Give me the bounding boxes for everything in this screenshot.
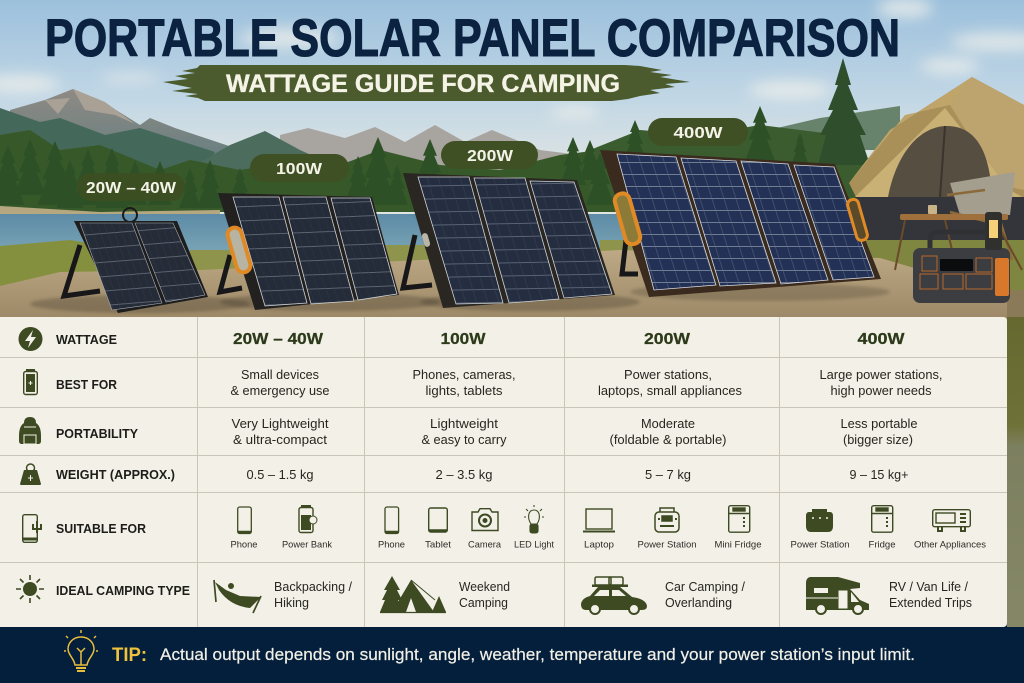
icon: phone — [238, 507, 251, 534]
icon: fridge — [872, 506, 893, 532]
row: weight — [20, 464, 908, 485]
label: 20W to 40W: 20W – 40W — [86, 180, 177, 197]
icon: RV — [806, 577, 869, 614]
label: 400W: 400W — [674, 125, 724, 142]
row: wattage — [18, 327, 906, 351]
row: portability: Lightweight — [430, 416, 498, 431]
row: portability: & ultra-compact — [233, 432, 327, 447]
solar panel: 400W — [600, 150, 881, 297]
background: camping landscape — [0, 0, 1024, 320]
row: ideal camping type: Overlanding — [665, 595, 732, 610]
icon: power bank — [299, 505, 317, 532]
row: suitable for: Other Appliances — [914, 540, 986, 550]
icon: mini fridge — [729, 506, 750, 532]
row: ideal camping type: IDEAL CAMPING TYPE — [56, 583, 190, 598]
right edge strip — [1007, 317, 1024, 627]
icon: sun — [16, 575, 44, 603]
row: portability: PORTABILITY — [56, 426, 138, 441]
row: wattage: 20W – 40W — [233, 331, 324, 348]
row: weight: 9 – 15 kg+ — [850, 467, 908, 482]
row: wattage: 100W — [440, 331, 486, 348]
row: suitable for: Phone — [378, 540, 405, 550]
tent — [849, 77, 1024, 240]
label: 20W to 40W — [77, 173, 185, 201]
solar panel: 20W to 40W — [64, 208, 208, 313]
icon: laptop — [583, 509, 615, 532]
row: best for — [24, 367, 942, 398]
solar panel: 200W — [403, 173, 615, 308]
icon: phone — [385, 507, 399, 534]
row: wattage: WATTAGE — [56, 332, 117, 347]
row: suitable for: Phone — [230, 540, 258, 550]
tip bar: TIP: — [112, 645, 147, 666]
row: ideal camping type: RV / Van Life / — [889, 579, 968, 594]
row: best for: Power stations, — [624, 367, 712, 382]
icon: weight — [20, 464, 41, 485]
icon: lightning bolt — [18, 327, 42, 351]
row: ideal camping type — [16, 575, 972, 614]
row: wattage: 400W — [858, 331, 906, 348]
row: portability: Very Lightweight — [232, 416, 329, 431]
row: wattage: 200W — [644, 331, 691, 348]
icon: hammock — [214, 580, 261, 613]
row: best for: high power needs — [830, 383, 932, 398]
row: suitable for: LED Light — [514, 540, 554, 550]
row: portability: Moderate — [641, 416, 695, 431]
icon: battery — [24, 369, 37, 394]
icon: other appliances — [933, 510, 970, 531]
row: ideal camping type: Camping — [459, 595, 508, 610]
row: suitable for: Tablet — [425, 540, 451, 550]
row: best for: Small devices — [241, 367, 319, 382]
row: ideal camping type: Extended Trips — [889, 595, 972, 610]
row: suitable for — [22, 505, 986, 550]
camp table and chair — [895, 172, 1022, 270]
icon: LED light — [524, 505, 544, 533]
row: portability: & easy to carry — [422, 432, 507, 447]
row: ideal camping type: Hiking — [274, 595, 309, 610]
label: 100W: 100W — [276, 161, 323, 178]
row: ideal camping type: Car Camping / — [665, 579, 745, 594]
row: best for: laptops, small appliances — [598, 383, 742, 398]
icon: trees and tent — [380, 576, 446, 612]
icon: backpack — [19, 417, 41, 444]
icon: power station outline — [655, 508, 679, 532]
power station — [913, 212, 1010, 303]
row: suitable for: Power Station — [790, 540, 850, 550]
row: best for: Phones, cameras, — [412, 367, 516, 382]
row: suitable for: Laptop — [584, 540, 614, 550]
row: ideal camping type: Weekend — [459, 579, 510, 594]
row: portability: Less portable — [840, 416, 918, 431]
row: suitable for: SUITABLE FOR — [56, 521, 147, 536]
row: weight: 5 – 7 kg — [645, 467, 691, 482]
row: suitable for: Camera — [468, 540, 502, 550]
icon: phone with plug — [22, 515, 41, 542]
row: best for: & emergency use — [230, 383, 330, 398]
comparison table — [0, 317, 1007, 627]
row: suitable for: Fridge — [868, 540, 896, 550]
subtitle banner: WATTAGE GUIDE FOR CAMPING — [226, 70, 620, 98]
row: portability: (foldable & portable) — [610, 432, 726, 447]
row: suitable for: Power Station — [638, 540, 696, 550]
row: portability: (bigger size) — [843, 432, 913, 447]
row: suitable for: Power Bank — [282, 540, 332, 550]
row: best for: lights, tablets — [426, 383, 503, 398]
tip bar — [0, 627, 1024, 683]
label: 200W: 200W — [467, 148, 514, 165]
subtitle banner — [163, 65, 690, 101]
label: 100W — [250, 154, 349, 182]
row: ideal camping type: Backpacking / — [274, 579, 352, 594]
row: portability — [19, 416, 918, 447]
row: weight: 2 – 3.5 kg — [436, 467, 492, 482]
icon: power station solid — [806, 509, 833, 532]
icon: light bulb — [64, 630, 98, 671]
row: weight: 0.5 – 1.5 kg — [246, 467, 314, 482]
row: weight: WEIGHT (APPROX.) — [56, 467, 175, 482]
row: best for: BEST FOR — [56, 377, 118, 392]
row: suitable for: Mini Fridge — [714, 540, 762, 550]
icon: car with roof box — [581, 577, 647, 614]
icon: tablet — [429, 508, 447, 532]
label: 200W — [441, 141, 538, 169]
icon: camera — [472, 509, 498, 530]
row: best for: Large power stations, — [820, 367, 942, 382]
tip bar: Actual output depends on sunlight, angle, weather, temperature and your power station’s input limit. — [160, 645, 915, 664]
label: 400W — [648, 118, 748, 146]
solar panel: 100W — [218, 193, 399, 310]
